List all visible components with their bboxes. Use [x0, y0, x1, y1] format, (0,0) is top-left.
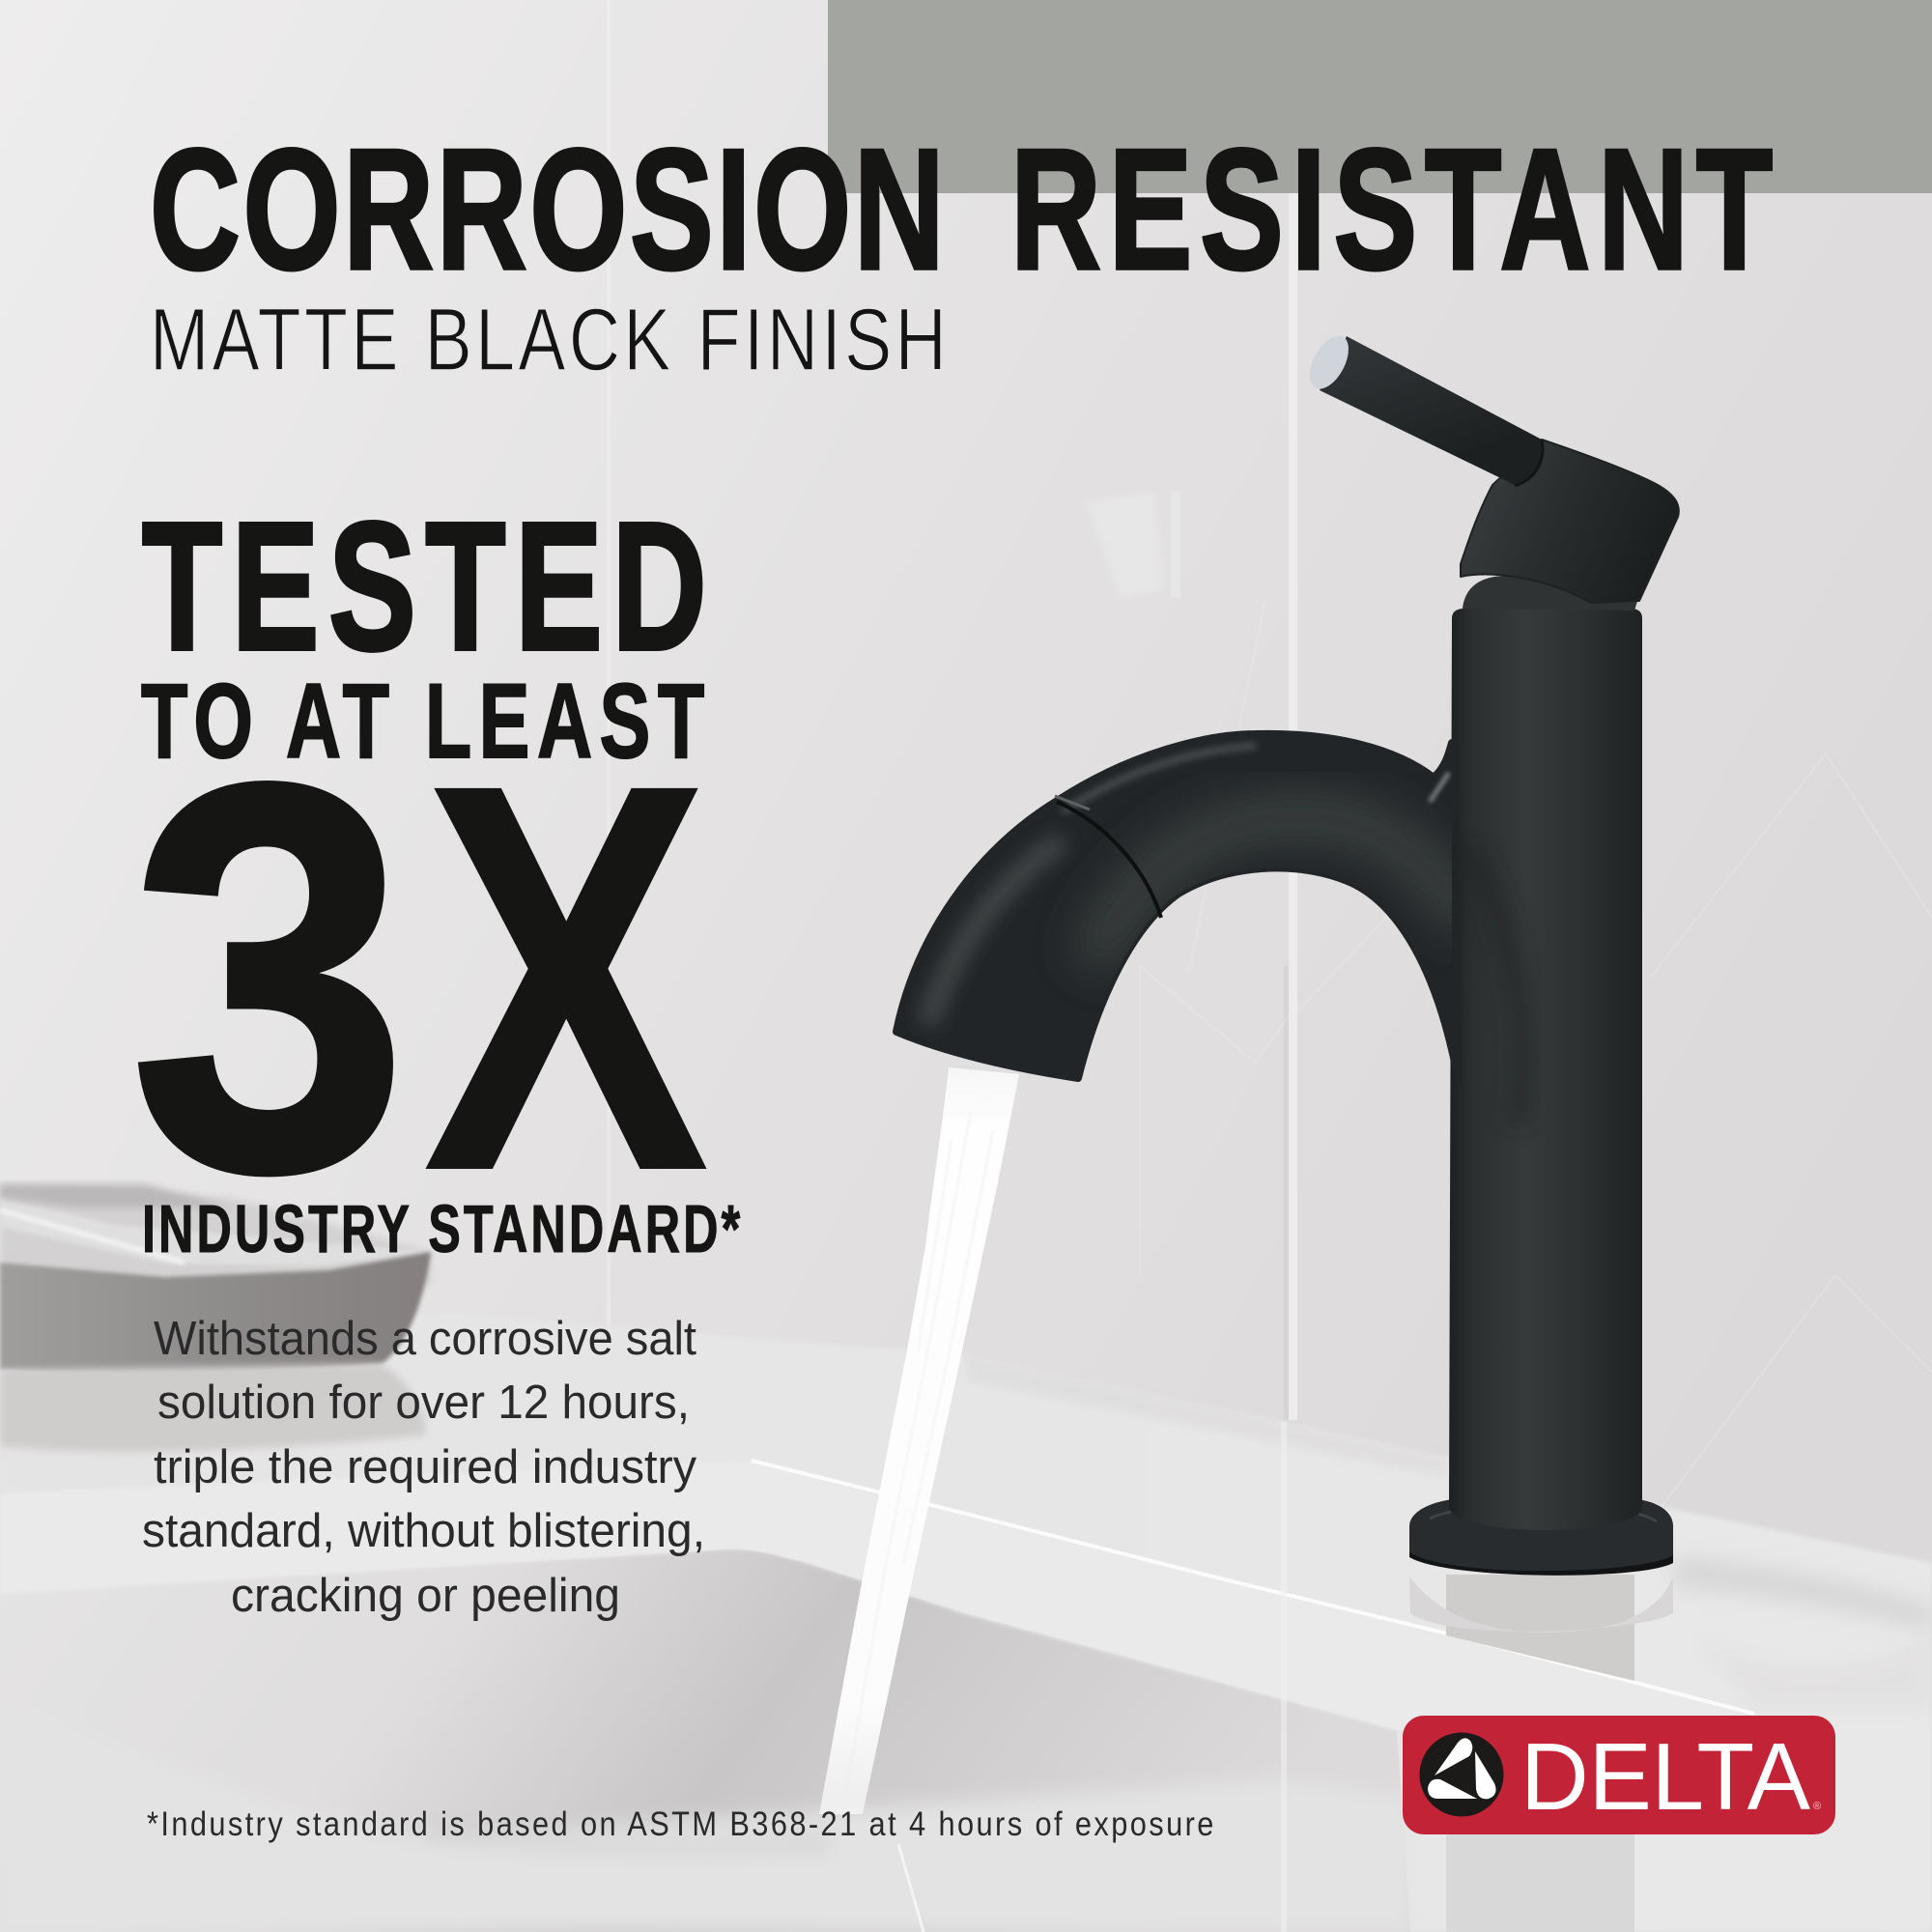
subtitle: MATTE BLACK FINISH: [150, 290, 947, 389]
description text: triple the required industry: [154, 1441, 696, 1493]
description text: cracking or peeling: [231, 1570, 620, 1622]
description text: solution for over 12 hours,: [157, 1377, 690, 1429]
Delta logo: [1403, 1716, 1835, 1834]
spout: [896, 734, 1523, 1125]
claim: 3X: 3: [129, 669, 409, 1285]
faucet: [896, 329, 1679, 1576]
claim: tested: TESTED: [142, 484, 707, 688]
water stream: [819, 1067, 1019, 1932]
title: [150, 114, 1773, 306]
description text: [142, 1313, 705, 1622]
description text: standard, without blistering,: [142, 1505, 705, 1557]
title: CORROSION: [150, 114, 945, 306]
claim: 3X: [129, 669, 711, 1285]
faucet body: [1449, 609, 1642, 1530]
claim: industry standard: INDUSTRY STANDARD*: [142, 1191, 740, 1266]
footnote: *Industry standard is based on ASTM B368-21 at 4 hours of exposure: [147, 1804, 1213, 1842]
title: RESISTANT: [1010, 114, 1773, 306]
Delta logo: ®: [1813, 1801, 1821, 1812]
handle hub: [1461, 440, 1679, 611]
claim: to at least: TO AT LEAST: [141, 662, 704, 781]
handle lever: [1302, 329, 1543, 486]
claim: 3X: X: [423, 669, 711, 1285]
blurred dish: [0, 1184, 431, 1452]
faucet base: [1409, 1498, 1673, 1576]
description text: Withstands a corrosive salt: [154, 1313, 696, 1365]
icon: delta triangle mark: [1420, 1733, 1503, 1816]
Delta logo: DELTA: [1520, 1723, 1811, 1830]
